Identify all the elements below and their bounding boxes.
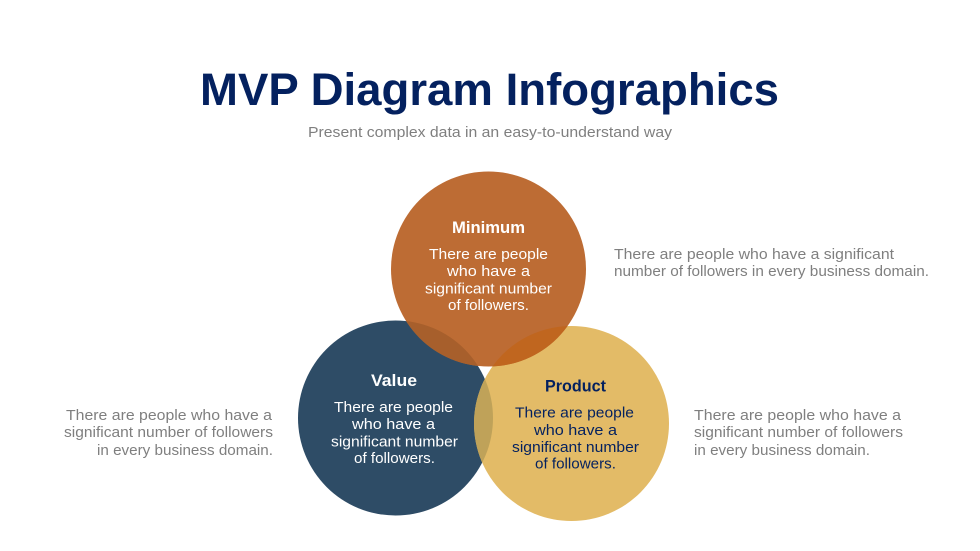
body: value: significant number: [331, 434, 458, 450]
side note: value: [64, 407, 273, 459]
side note: product: [694, 407, 903, 459]
body: value: of followers.: [354, 450, 435, 467]
circle: minimum: [391, 172, 586, 366]
side note: value: significant number of followers: [64, 424, 273, 441]
title: MVP Diagram Infographics: [200, 64, 779, 115]
body: minimum: significant number: [425, 280, 552, 298]
body: product: of followers.: [535, 456, 616, 472]
overlap: minimum and product: [492, 326, 568, 366]
subtitle: Present complex data in an easy-to-understand way: [308, 124, 673, 141]
body: minimum: of followers.: [448, 297, 529, 314]
body: value: [331, 399, 458, 467]
side note: product: There are people who have a: [694, 407, 902, 424]
venn diagram: [298, 172, 669, 521]
body: value: There are people: [334, 399, 453, 416]
heading: value: Value: [371, 372, 417, 390]
body: product: who have a: [533, 422, 618, 439]
text block: product: [512, 378, 639, 472]
text block: minimum: [425, 219, 552, 314]
body: product: [512, 404, 639, 472]
body: product: There are people: [515, 404, 634, 422]
body: value: who have a: [351, 416, 436, 433]
body: product: significant number: [512, 439, 639, 456]
body: minimum: There are people: [429, 246, 548, 263]
overlap: value and product: [474, 379, 493, 462]
overlap: minimum and value: [406, 321, 478, 366]
heading: minimum: Minimum: [452, 219, 525, 237]
side note: minimum: [614, 246, 929, 280]
circle: value: [298, 320, 493, 516]
side note: value: in every business domain.: [97, 442, 273, 459]
side note: product: in every business domain.: [694, 442, 870, 459]
body: minimum: [425, 246, 552, 314]
body: minimum: who have a: [446, 263, 531, 280]
side note: product: significant number of followers: [694, 424, 903, 441]
text block: value: [331, 372, 458, 467]
circle: product: [474, 326, 669, 521]
side note: value: There are people who have a: [66, 407, 273, 424]
side note: minimum: There are people who have a significant: [614, 246, 895, 263]
side note: minimum: number of followers in every business domain.: [614, 263, 929, 280]
heading: product: Product: [545, 378, 606, 396]
